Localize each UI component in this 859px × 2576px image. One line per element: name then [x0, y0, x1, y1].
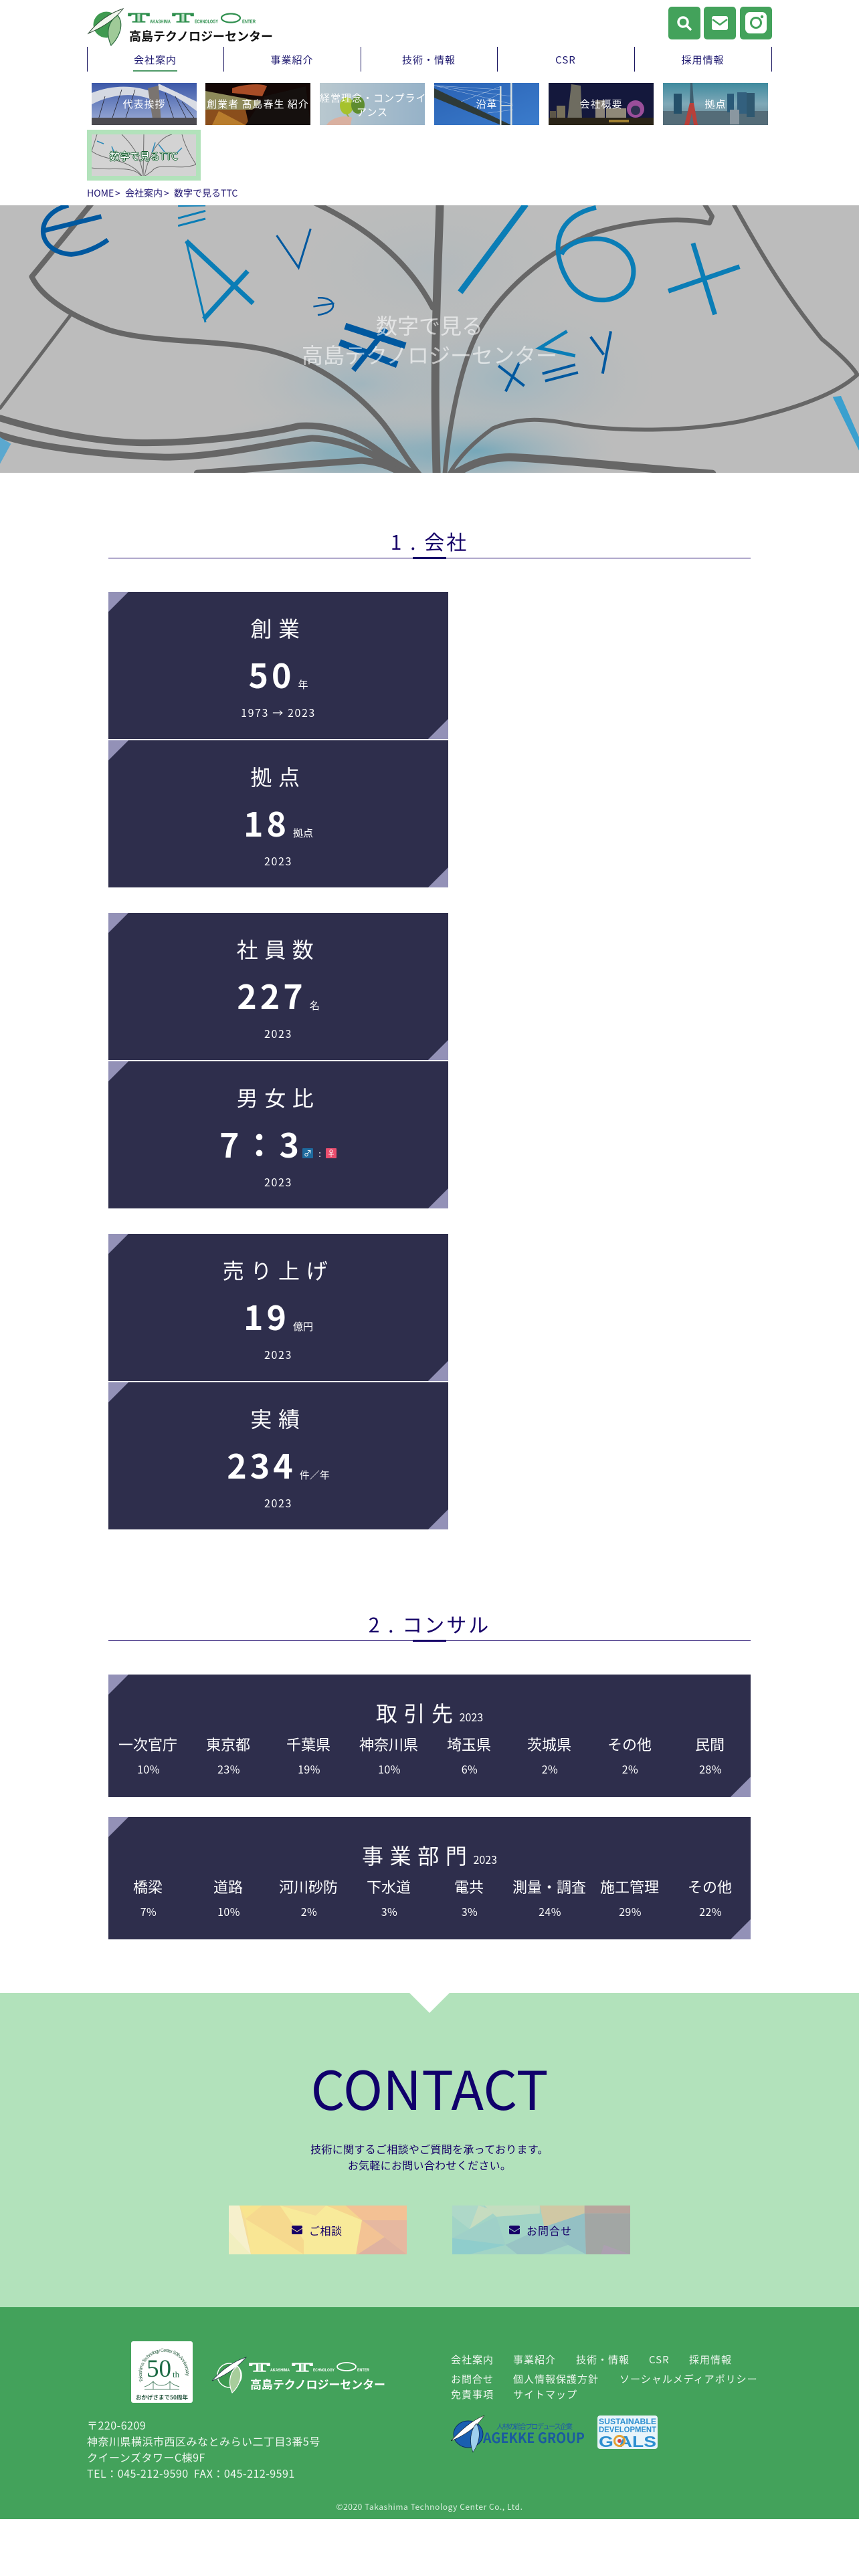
- panel title: 取引先2023: [376, 1697, 483, 1728]
- footer address: TEL：045-212-9590 FAX：045-212-9591: [87, 2465, 295, 2481]
- icon: male symbol: [302, 1148, 313, 1158]
- division 測量・調査: 24%: [539, 1903, 561, 1919]
- footer navigation: サイトマップ: [513, 2387, 577, 2401]
- contact text: お気軽にお問い合わせください。: [348, 2157, 511, 2173]
- breadcrumb: >: [115, 187, 120, 200]
- client 神奈川県: 10%: [378, 1761, 401, 1777]
- panel title: 事業部門2023: [362, 1840, 497, 1870]
- client 東京都: [206, 1733, 250, 1777]
- label: 拠点: [250, 761, 306, 792]
- division その他: [688, 1876, 732, 1919]
- thumbnail: 経営理念・コンプライアンス: アンス: [357, 105, 388, 119]
- year: 2023: [264, 1495, 292, 1511]
- button label: お問合せ: [527, 2222, 572, 2238]
- footer logo: ENTER: [357, 2369, 370, 2373]
- number: 50 年: [248, 650, 308, 698]
- nav item: CSR: CSR: [555, 53, 576, 67]
- label: 社員数: [237, 934, 320, 964]
- division 河川砂防: 2%: [301, 1903, 317, 1919]
- badge: 50th anniversary: Takashima Technology Center 50th Anniversary: [138, 2349, 189, 2382]
- logo: Takashima Technology Center: T: [173, 11, 195, 25]
- section heading: 2. コンサル: [108, 1609, 751, 1642]
- nav active underline: [133, 70, 177, 72]
- breadcrumb: [87, 187, 237, 200]
- client 神奈川県: 神奈川県: [359, 1733, 418, 1755]
- footer navigation: [451, 2355, 759, 2400]
- division 下水道: [367, 1876, 411, 1919]
- client その他: [607, 1733, 652, 1777]
- panel: 男女比: [108, 1061, 448, 1208]
- client 神奈川県: [359, 1733, 418, 1777]
- footer navigation: 個人情報保護方針: [513, 2372, 599, 2386]
- button: お問合せ: [452, 2206, 630, 2254]
- division 下水道: 下水道: [367, 1876, 411, 1897]
- panel: 拠点: [108, 740, 448, 887]
- breadcrumb: HOME: [87, 187, 114, 200]
- notch triangle: [409, 1993, 450, 2013]
- year: 2023: [264, 1346, 292, 1362]
- thumbnail: 会社概要: 会社概要: [579, 97, 622, 111]
- division 道路: 道路: [213, 1876, 243, 1897]
- division 橋梁: 橋梁: [133, 1876, 163, 1897]
- footer logo: AKASHIMA: [270, 2369, 290, 2373]
- badge: 50th anniversary: 50: [147, 2355, 171, 2383]
- logo: AGEKKE GROUP: [451, 2416, 585, 2453]
- thumbnail: 経営理念・コンプライアンス: [320, 83, 425, 125]
- panel: 社員数: [108, 913, 448, 1060]
- client その他: その他: [607, 1733, 652, 1755]
- label: 男女比: [237, 1082, 320, 1113]
- footer navigation: 技術・情報: [576, 2353, 630, 2367]
- year: 2023: [264, 853, 292, 869]
- thumbnail: 沿革: 沿革: [476, 97, 498, 111]
- footer logo: [211, 2356, 387, 2395]
- footer navigation: 事業紹介: [513, 2353, 556, 2367]
- number: 19 億円: [244, 1292, 313, 1340]
- logo: Takashima Technology Center: 高島テクノロジーセンター: [129, 27, 273, 45]
- logo: AGEKKE GROUP: 人材の総合プロデュース企業: [496, 2422, 573, 2432]
- year: 2023: [264, 1174, 292, 1190]
- contact text: 技術に関するご相談やご質問を承っております。: [310, 2141, 549, 2157]
- division その他: 22%: [699, 1903, 722, 1919]
- thumbnail: 拠点: [663, 83, 768, 125]
- breadcrumb: >: [164, 187, 169, 200]
- client 千葉県: 千葉県: [286, 1733, 330, 1755]
- client 民間: [695, 1733, 725, 1777]
- client 埼玉県: 埼玉県: [447, 1733, 491, 1755]
- client 東京都: 東京都: [206, 1733, 250, 1755]
- footer logo: ECHNOLOGY: [313, 2369, 335, 2373]
- thumbnail: 会社概要: [549, 83, 654, 125]
- division 電共: [454, 1876, 484, 1919]
- client 埼玉県: 6%: [462, 1761, 478, 1777]
- illustration: open book: [0, 205, 859, 473]
- breadcrumb: 会社案内: [125, 187, 163, 200]
- logo: Takashima Technology Center: [87, 8, 273, 46]
- division 道路: 10%: [217, 1903, 240, 1919]
- number: 7：3: [219, 1119, 302, 1168]
- client 一次官庁: 一次官庁: [118, 1733, 177, 1755]
- thumbnail: 数字で見るTTC (active): [87, 130, 201, 181]
- division 橋梁: [133, 1876, 163, 1919]
- division その他: その他: [688, 1876, 732, 1897]
- label: 売り上げ: [223, 1255, 334, 1285]
- thumbnail: 沿革: [434, 83, 539, 125]
- footer navigation: お問合せ: [451, 2372, 494, 2386]
- footer logo: 高島テクノロジーセンター: [250, 2375, 385, 2392]
- badge: 50th anniversary: th: [173, 2369, 180, 2379]
- client 茨城県: 2%: [542, 1761, 558, 1777]
- thumbnail: 拠点: 拠点: [704, 97, 727, 111]
- icon: male symbol: ♂: [304, 1148, 312, 1159]
- icon: mail button: [704, 7, 736, 39]
- thumbnail: 代表挨拶: 代表挨拶: [122, 97, 166, 111]
- client 埼玉県: [447, 1733, 491, 1777]
- button: ご相談: [229, 2206, 407, 2254]
- colon between icons: :: [318, 1147, 321, 1160]
- footer address: 〒220-6209: [87, 2417, 146, 2433]
- thumbnail: 創業者 髙島春生 紹介: [205, 83, 310, 125]
- thumbnail: 数字で見るTTC (active): 数字で見るTTC: [110, 149, 178, 163]
- thumbnail: 経営理念・コンプライアンス: 経営理念・コンプライ: [320, 91, 425, 105]
- logo: Sustainable Development Goals: DEVELOPMENT: [599, 2426, 656, 2434]
- section heading: 2. コンサル: 2 . コンサル: [369, 1609, 490, 1638]
- footer logo: T: [292, 2361, 312, 2374]
- footer: [0, 2307, 859, 2519]
- client 茨城県: [527, 1733, 571, 1777]
- logo: Takashima Technology Center: ECHNOLOGY: [195, 20, 218, 24]
- badge: 50th anniversary: [131, 2341, 193, 2403]
- logo: Takashima Technology Center: T: [128, 11, 151, 25]
- panel: 事業部門: [108, 1817, 751, 1939]
- footer navigation: 会社案内: [451, 2353, 494, 2367]
- hero subtitle: 高島テクノロジーセンター: [302, 339, 557, 370]
- nav item: 採用情報: 採用情報: [681, 53, 724, 67]
- division 河川砂防: 河川砂防: [279, 1876, 338, 1897]
- panel: 取引先: [108, 1675, 751, 1797]
- number: 227 名: [237, 971, 320, 1019]
- navigation: [87, 47, 772, 72]
- client 一次官庁: 10%: [137, 1761, 160, 1777]
- division 施工管理: [600, 1876, 659, 1919]
- nav item: 技術・情報: 技術・情報: [402, 53, 456, 67]
- section heading: 1. 会社: 1 . 会社: [391, 526, 468, 556]
- label: 創業: [250, 613, 306, 643]
- period: 1973 → 2023: [241, 704, 316, 720]
- division 電共: 電共: [454, 1876, 484, 1897]
- thumbnail: 代表挨拶: [92, 83, 197, 125]
- division 電共: 3%: [462, 1903, 478, 1919]
- division 測量・調査: [512, 1876, 586, 1919]
- division 施工管理: 施工管理: [600, 1876, 659, 1897]
- icon: instagram button: [740, 7, 772, 39]
- client 千葉県: 19%: [298, 1761, 320, 1777]
- client 千葉県: [286, 1733, 330, 1777]
- panel: 売り上げ: [108, 1234, 448, 1381]
- client 民間: 民間: [695, 1733, 725, 1755]
- nav item: 会社案内: 会社案内: [134, 53, 177, 67]
- footer logo: T: [250, 2361, 270, 2374]
- division 測量・調査: 測量・調査: [512, 1876, 586, 1897]
- icon: envelope: [292, 2226, 302, 2234]
- division 施工管理: 29%: [619, 1903, 642, 1919]
- hero title: 数字で見る: [376, 310, 483, 340]
- logo: Sustainable Development Goals: SUSTAINABLE: [599, 2418, 656, 2426]
- icon: female symbol: ♀: [327, 1148, 335, 1159]
- division 下水道: 3%: [381, 1903, 397, 1919]
- division 河川砂防: [279, 1876, 338, 1919]
- client 一次官庁: [118, 1733, 177, 1777]
- icon: envelope: [509, 2226, 520, 2234]
- button label: ご相談: [309, 2222, 343, 2238]
- hero: book illustration with math symbols: [0, 205, 859, 473]
- label: 実績: [250, 1403, 306, 1434]
- footer address: 神奈川県横浜市西区みなとみらい二丁目3番5号: [87, 2433, 320, 2449]
- panel: 創業: [108, 592, 448, 739]
- footer navigation: CSR: [649, 2353, 670, 2367]
- copyright: ©2020 Takashima Technology Center Co., Ltd.: [337, 2501, 522, 2512]
- logo: Sustainable Development Goals: [597, 2416, 658, 2449]
- contact heading: CONTACT: [310, 2048, 549, 2126]
- footer address: クイーンズタワーC棟9F: [87, 2449, 205, 2465]
- nav item: 事業紹介: 事業紹介: [270, 53, 313, 67]
- footer navigation: 採用情報: [689, 2353, 732, 2367]
- number: 234 件／年: [227, 1440, 330, 1489]
- logo: Takashima Technology Center: ENTER: [242, 20, 256, 24]
- year: 2023: [264, 1025, 292, 1041]
- division 道路: [213, 1876, 243, 1919]
- footer navigation: 免責事項: [451, 2387, 494, 2401]
- number: 18 拠点: [244, 798, 313, 847]
- icon: search button: [668, 7, 700, 39]
- panel: 実績: [108, 1382, 448, 1529]
- breadcrumb: 数字で見るTTC: [174, 187, 237, 200]
- client その他: 2%: [622, 1761, 638, 1777]
- client 民間: 28%: [699, 1761, 722, 1777]
- division 橋梁: 7%: [140, 1903, 157, 1919]
- badge: 50th anniversary: おかげさまで50周年: [136, 2393, 189, 2401]
- panel: contact: [0, 1993, 859, 2307]
- client 茨城県: 茨城県: [527, 1733, 571, 1755]
- icon: female symbol: [326, 1148, 337, 1158]
- footer navigation: ソーシャルメディアポリシー: [619, 2372, 758, 2386]
- client 東京都: 23%: [217, 1761, 240, 1777]
- contact text: [310, 2141, 549, 2173]
- section heading: 1. 会社: [108, 526, 751, 559]
- thumbnail: 創業者 髙島春生 紹介: 創業者 髙島春生 紹介: [207, 97, 309, 111]
- logo: Takashima Technology Center: AKASHIMA: [150, 20, 171, 24]
- footer address: [87, 2420, 328, 2480]
